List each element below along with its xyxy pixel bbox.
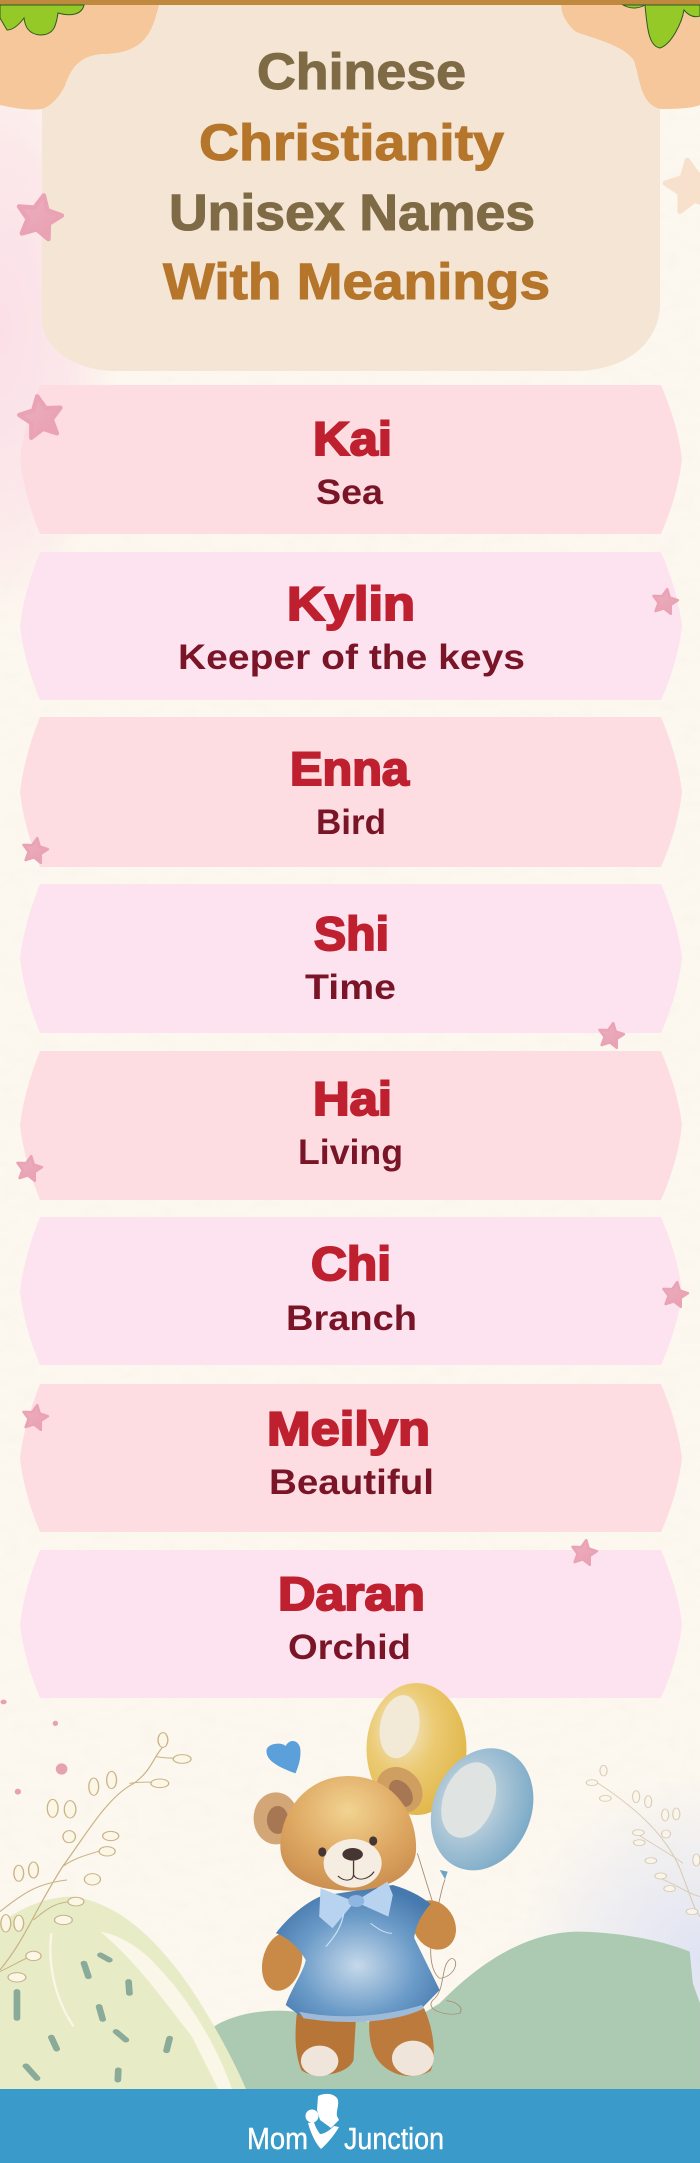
logo text: Junction: Junction [344, 2121, 444, 2156]
band: Shi [20, 884, 682, 1033]
corner blob: top right peach [561, 5, 700, 109]
icon: green leaves top left [0, 5, 84, 35]
star: Kylin [651, 587, 679, 615]
meaning: Bird: Bird [316, 803, 386, 842]
top bar [0, 0, 700, 5]
balloon: yellow [366, 1683, 466, 1815]
meaning: Sea: Sea [316, 473, 384, 512]
band: Kylin [20, 552, 682, 700]
panel: title [42, 5, 660, 371]
name: Kylin: Kylin [287, 577, 415, 630]
name: Kai: Kai [313, 412, 392, 465]
bear: feet [301, 2041, 434, 2076]
bear: blue dress [276, 1885, 440, 2022]
band: Hai [20, 1051, 682, 1200]
title line: Chinese: Chinese [257, 43, 466, 100]
band: Chi [20, 1217, 682, 1365]
bear: mouth [338, 1861, 374, 1880]
star: peach right edge [662, 156, 700, 213]
logo icon: mother and child [306, 2094, 339, 2149]
hill: pale yellow with dashes [0, 1897, 246, 2090]
icon: blue heart [266, 1741, 300, 1773]
meaning: Orchid: Orchid [288, 1628, 411, 1667]
star: Meilyn [21, 1403, 49, 1431]
name: Meilyn: Meilyn [267, 1402, 430, 1455]
star: Enna [21, 836, 49, 864]
title line: With Meanings: With Meanings [163, 253, 550, 310]
title line: Unisex Names: Unisex Names [169, 184, 535, 241]
meaning: Living: Living [298, 1133, 403, 1172]
footer bar [0, 2089, 700, 2163]
star: title left [14, 191, 65, 241]
balloon strings [417, 1853, 461, 2014]
icon: green leaves top right [623, 5, 700, 48]
bear: arms [257, 1897, 462, 1993]
name: Chi: Chi [311, 1237, 391, 1290]
corner blob: top left peach [0, 5, 159, 110]
title line: Christianity: Christianity [199, 114, 505, 171]
star: Hai [15, 1154, 43, 1182]
bear: muzzle [324, 1839, 382, 1888]
bear: bow tie [319, 1882, 393, 1947]
branches: left [0, 1733, 191, 1982]
bear: head [280, 1776, 416, 1891]
branches: right [586, 1765, 700, 1917]
logo text: Mom: Mom [247, 2121, 308, 2156]
name: Daran: Daran [278, 1567, 425, 1620]
meaning: Branch: Branch [286, 1299, 417, 1338]
band: Meilyn [20, 1384, 682, 1532]
balloon: blue [419, 1742, 546, 1879]
dots: pink [0, 1700, 67, 1795]
band: Daran [20, 1550, 682, 1698]
bear: nose and eyes [318, 1836, 377, 1861]
band: Kai [20, 385, 682, 534]
star: Chi [661, 1280, 689, 1308]
name: Hai: Hai [313, 1072, 392, 1125]
meaning: Keeper of the keys: Keeper of the keys [178, 638, 525, 677]
star: Kai [17, 393, 65, 439]
scene: hills, branches, bear with balloons [0, 1683, 700, 2090]
star: Daran [570, 1538, 598, 1566]
bear: ears [254, 1763, 429, 1844]
name: Enna: Enna [290, 742, 410, 795]
band: Enna [20, 717, 682, 867]
bear: legs [296, 2008, 434, 2076]
meaning: Time: Time [305, 968, 396, 1007]
bear [254, 1763, 462, 2076]
star: Shi [597, 1021, 625, 1049]
name: Shi: Shi [314, 907, 389, 960]
logo: MomJunction [247, 2094, 444, 2156]
hill: green [192, 1932, 700, 2090]
meaning: Beautiful: Beautiful [269, 1463, 434, 1502]
